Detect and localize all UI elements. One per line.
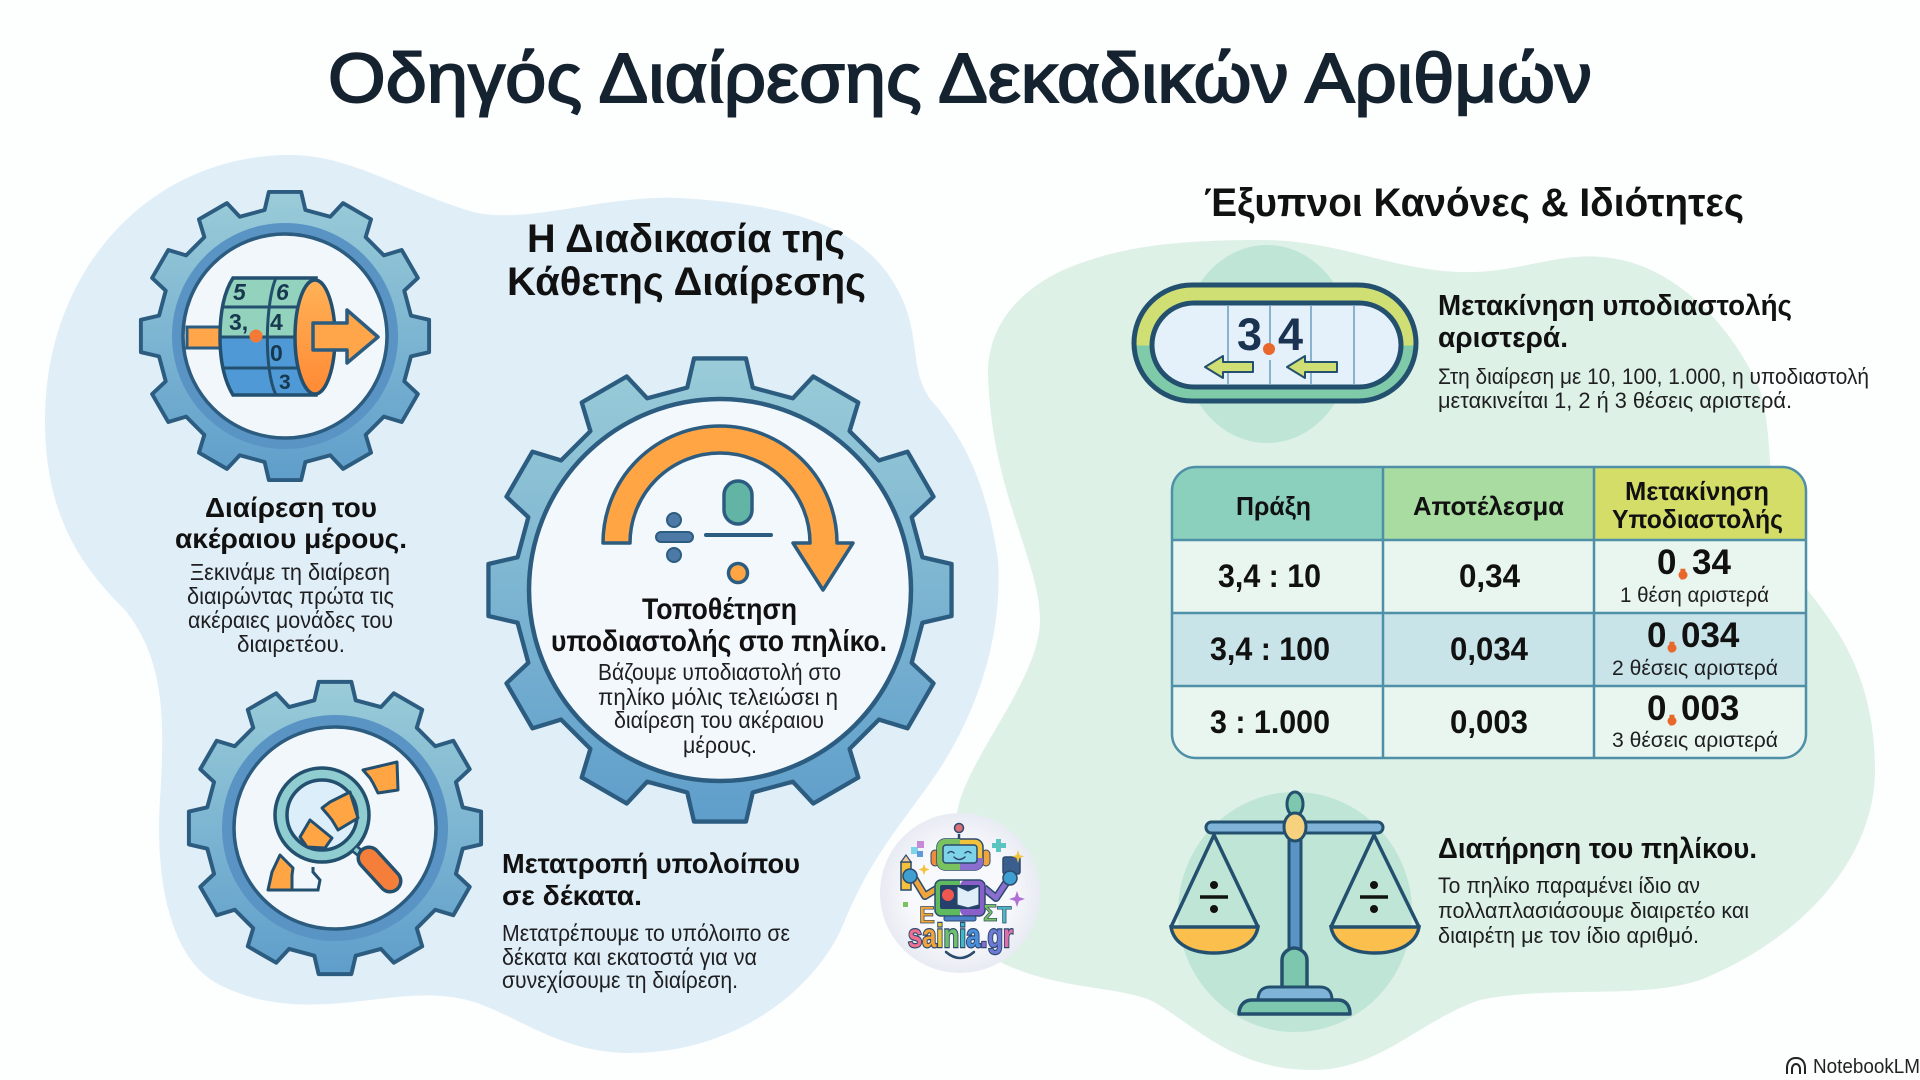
table header: Μετακίνηση <box>1625 476 1769 506</box>
heading: vertical division process: Η Διαδικασία της <box>527 217 845 261</box>
text: E Σ T letters <box>919 900 1012 929</box>
text block: move decimal left: αριστερά. <box>1438 322 1568 354</box>
text block: convert remainder to tenths: Μετατρέπουμε το υπόλοιπο σε <box>502 920 790 946</box>
icon: curved arrow <box>603 426 853 590</box>
icon: robot head <box>931 824 990 870</box>
icon: broken piece upper right <box>363 762 398 793</box>
text block: convert remainder to tenths: Μετατροπή υπολοίπου <box>502 848 800 879</box>
heading: smart rules and properties: Έξυπνοι Κανόνες & Ιδιότητες <box>1204 181 1744 225</box>
icon: digit cylinder: 5 <box>233 279 247 305</box>
icon: digit cylinder: 6 <box>276 279 289 305</box>
gear: divide the integer part <box>141 192 429 480</box>
gear: place the decimal point <box>488 358 952 822</box>
icon: digit cylinder: 4 <box>270 309 283 335</box>
text block: place the decimal point: διαίρεση του ακέραιου <box>614 707 824 733</box>
table row 2: , <box>1667 616 1677 655</box>
heading: vertical division process <box>507 217 866 304</box>
icon: robot body with screen and book <box>935 880 985 921</box>
table header: Αποτέλεσμα <box>1413 491 1564 521</box>
icon: decimal point pill: 4 <box>1278 309 1303 360</box>
table row 2: 3,4 : 100 <box>1210 631 1330 667</box>
text block: divide the integer part: ακέραιες μονάδες του <box>188 607 393 633</box>
panel background: process blob <box>45 155 999 1053</box>
text block: place the decimal point: μέρους. <box>683 732 757 758</box>
text block: keep the quotient: πολλαπλασιάσουμε διαιρετέο και <box>1438 898 1749 923</box>
panel background: rules blob <box>956 240 1875 1070</box>
text block: place the decimal point: υποδιαστολής στο πηλίκο. <box>551 625 887 658</box>
heading: vertical division process: Κάθετης Διαίρεσης <box>507 260 866 304</box>
table row 3 <box>1210 689 1778 752</box>
icon: robot arms, pencil and chip <box>901 839 1025 907</box>
table row 2 <box>1210 616 1778 680</box>
gear: convert remainder to tenths <box>189 682 481 974</box>
text block: move decimal left: Στη διαίρεση με 10, 100, 1.000, η υποδιαστολή <box>1438 364 1869 389</box>
text block: convert remainder to tenths: σε δέκατα. <box>502 880 642 911</box>
icon: balance scale <box>1171 792 1419 1032</box>
table header: Πράξη <box>1236 491 1311 521</box>
table row 3: 3 : 1.000 <box>1210 704 1330 740</box>
table row 1: 1 θέση αριστερά <box>1620 584 1769 607</box>
text block: divide the integer part: ακέραιου μέρους. <box>175 523 407 554</box>
text block: place the decimal point: πηλίκο μόλις τελειώσει η <box>598 684 838 710</box>
text block: convert remainder to tenths <box>502 848 800 993</box>
table header: Υποδιαστολής <box>1612 504 1783 534</box>
icon: digit cylinder <box>220 278 335 395</box>
text block: divide the integer part: διαιρώντας πρώτα τις <box>187 583 394 609</box>
table row 2: 0 <box>1647 616 1666 655</box>
table row 1: 0,34 <box>1459 558 1520 594</box>
text block: move decimal left: Μετακίνηση υποδιαστολής <box>1438 290 1792 322</box>
icon: magnifying glass <box>275 768 390 881</box>
text block: move decimal left <box>1438 290 1869 413</box>
text block: place the decimal point: Βάζουμε υποδιαστολή στο <box>598 659 841 685</box>
text: sainia.gr wordmark: sainia.gr <box>908 917 1013 954</box>
table row 2: 2 θέσεις αριστερά <box>1612 657 1778 680</box>
title: Οδηγός Διαίρεσης Δεκαδικών Αριθμών <box>328 39 1592 117</box>
text block: keep the quotient <box>1438 833 1757 948</box>
text block: place the decimal point <box>551 593 887 758</box>
text block: divide the integer part: Ξεκινάμε τη διαίρεση <box>190 559 390 585</box>
text: E Σ T letters: T <box>997 902 1012 929</box>
table: division by powers of ten <box>1172 467 1806 758</box>
table row 1: 3,4 : 10 <box>1218 558 1321 594</box>
text block: keep the quotient: διαιρέτη με τον ίδιο αριθμό. <box>1438 923 1699 948</box>
icon: decimal point pill <box>1134 245 1416 443</box>
icon: broken piece lower left <box>268 855 320 890</box>
text block: move decimal left: μετακινείται 1, 2 ή 3 θέσεις αριστερά. <box>1438 388 1792 413</box>
text block: divide the integer part: διαιρετέου. <box>237 631 345 657</box>
icon: right arrow <box>313 310 378 363</box>
table row 3: , <box>1667 689 1677 728</box>
icon: digit cylinder: 3, <box>229 309 248 335</box>
text block: keep the quotient: Το πηλίκο παραμένει ίδιο αν <box>1438 873 1700 898</box>
text block: divide the integer part: Διαίρεση του <box>205 492 377 523</box>
table row 1: , <box>1678 543 1688 582</box>
table row 1: 0 <box>1657 543 1676 582</box>
table row 3: 003 <box>1681 689 1739 728</box>
table row 2: 0,034 <box>1450 631 1528 667</box>
table header <box>1236 476 1783 534</box>
table row 2: 034 <box>1681 616 1740 655</box>
logo: sainia.gr robot <box>880 813 1040 973</box>
text block: convert remainder to tenths: δέκατα και εκατοστά για να <box>502 944 757 970</box>
icon: digit cylinder: 3 <box>279 371 291 394</box>
text block: keep the quotient: Διατήρηση του πηλίκου. <box>1438 833 1757 865</box>
icon: left arrow shaft <box>187 327 223 348</box>
text: E Σ T letters: E <box>919 902 935 929</box>
table row 1: 34 <box>1692 543 1731 582</box>
text block: place the decimal point: Τοποθέτηση <box>642 593 797 626</box>
icon: digit cylinder: 0 <box>270 340 283 366</box>
text block: divide the integer part <box>175 492 407 657</box>
icon: decimal point pill: 3 <box>1237 309 1262 360</box>
table row 1 <box>1218 543 1769 607</box>
table row 3: 3 θέσεις αριστερά <box>1612 729 1778 752</box>
table row 3: 0,003 <box>1450 704 1528 740</box>
text: E Σ T letters: Σ <box>983 900 997 927</box>
table row 3: 0 <box>1647 689 1666 728</box>
text block: convert remainder to tenths: συνεχίσουμε τη διαίρεση. <box>502 967 738 993</box>
icon: division sign and zero <box>656 481 773 582</box>
